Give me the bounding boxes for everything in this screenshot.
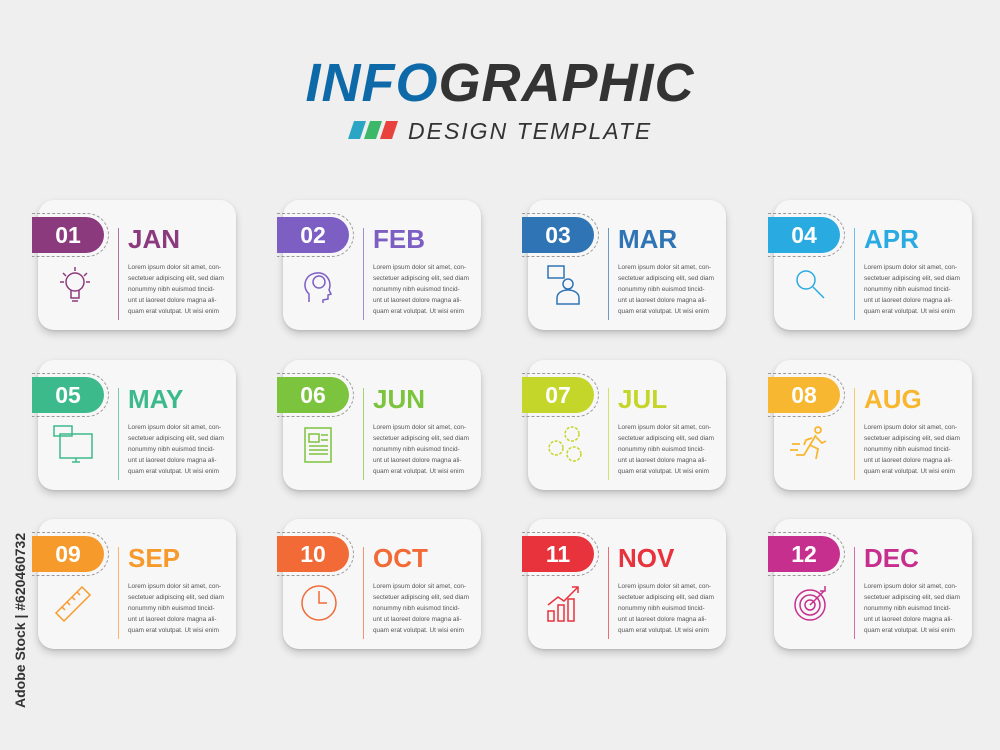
panel: 11 NOV: NOV [618, 543, 674, 573]
panel: 02 FEB: FEB [373, 224, 425, 254]
panel: 06 JUN: 06 [300, 382, 326, 408]
panel: 02 FEB: 02 [300, 222, 326, 248]
panel: 08 AUG: AUG [864, 384, 922, 414]
panel: 05 MAY: 05 [55, 382, 81, 408]
panel: 07 JUL: Lorem ipsum dolor sit amet, con- [618, 424, 711, 431]
panel: 11 NOV: sectetuer adipiscing elit, sed diam [618, 594, 714, 601]
panel: 09 SEP: sectetuer adipiscing elit, sed diam [128, 594, 224, 601]
panel: 11 NOV: quam erat volutpat. Ut wisi enim [618, 627, 709, 634]
panel: 08 AUG: unt ut laoreet dolore magna ali- [864, 457, 952, 464]
panel: 10 OCT: Lorem ipsum dolor sit amet, con- [373, 583, 466, 590]
panel: 09 SEP: Lorem ipsum dolor sit amet, con- [128, 583, 221, 590]
panel: 02 FEB: quam erat volutpat. Ut wisi enim [373, 308, 464, 315]
panel: 11 NOV: nonummy nibh euismod tincid- [618, 605, 705, 612]
icon: color stripes [348, 121, 398, 139]
panel: 03 MAR: sectetuer adipiscing elit, sed diam [618, 275, 714, 282]
panel: 05 MAY [38, 360, 236, 490]
panel: 01 JAN [38, 200, 236, 330]
panel: 08 AUG [774, 360, 972, 490]
panel: 11 NOV: unt ut laoreet dolore magna ali- [618, 616, 706, 623]
panel: 08 AUG: quam erat volutpat. Ut wisi enim [864, 468, 955, 475]
panel: 04 APR: unt ut laoreet dolore magna ali- [864, 297, 952, 304]
panel: 12 DEC: Lorem ipsum dolor sit amet, con- [864, 583, 957, 590]
panel: 05 MAY: MAY [128, 384, 183, 414]
panel: 12 DEC: quam erat volutpat. Ut wisi enim [864, 627, 955, 634]
panel: 07 JUL: unt ut laoreet dolore magna ali- [618, 457, 706, 464]
panel: 08 AUG: nonummy nibh euismod tincid- [864, 446, 951, 453]
panel: 03 MAR [528, 200, 726, 330]
panel: 05 MAY: quam erat volutpat. Ut wisi enim [128, 468, 219, 475]
panel: 07 JUL: 07 [545, 382, 571, 408]
panel: 01 JAN: nonummy nibh euismod tincid- [128, 286, 215, 293]
panel: 12 DEC: unt ut laoreet dolore magna ali- [864, 616, 952, 623]
panel: 07 JUL: sectetuer adipiscing elit, sed diam [618, 435, 714, 442]
panel: 12 DEC: sectetuer adipiscing elit, sed diam [864, 594, 960, 601]
panel: 03 MAR: quam erat volutpat. Ut wisi enim [618, 308, 709, 315]
panel: 11 NOV [528, 519, 726, 649]
panel: 02 FEB: nonummy nibh euismod tincid- [373, 286, 460, 293]
panel: 03 MAR: Lorem ipsum dolor sit amet, con- [618, 264, 711, 271]
panel: 02 FEB: Lorem ipsum dolor sit amet, con- [373, 264, 466, 271]
panel: 07 JUL [528, 360, 726, 490]
panel: 12 DEC [774, 519, 972, 649]
panel: 08 AUG: 08 [791, 382, 817, 408]
icon: monitor chat [53, 425, 93, 463]
icon: gears [548, 426, 582, 462]
panel: 02 FEB: unt ut laoreet dolore magna ali- [373, 297, 461, 304]
panel: 08 AUG: sectetuer adipiscing elit, sed diam [864, 435, 960, 442]
panel: 06 JUN: JUN [373, 384, 425, 414]
panel: 04 APR [774, 200, 972, 330]
panel: 10 OCT: quam erat volutpat. Ut wisi enim [373, 627, 464, 634]
icon: target [794, 586, 826, 621]
panel: 01 JAN: quam erat volutpat. Ut wisi enim [128, 308, 219, 315]
icon: head [304, 272, 332, 303]
panel: 06 JUN: unt ut laoreet dolore magna ali- [373, 457, 461, 464]
icon: clock [301, 585, 337, 621]
panel: 10 OCT: sectetuer adipiscing elit, sed diam [373, 594, 469, 601]
title: INFOGRAPHIC [305, 53, 694, 113]
panel: 05 MAY: unt ut laoreet dolore magna ali- [128, 457, 216, 464]
icon: ruler [55, 586, 91, 622]
panel: 06 JUN: nonummy nibh euismod tincid- [373, 446, 460, 453]
panel: 03 MAR: unt ut laoreet dolore magna ali- [618, 297, 706, 304]
panel: 12 DEC: nonummy nibh euismod tincid- [864, 605, 951, 612]
panel: 10 OCT: 10 [300, 541, 326, 567]
panel: 06 JUN [283, 360, 481, 490]
panel: 04 APR: 04 [791, 222, 817, 248]
subtitle: DESIGN TEMPLATE [408, 118, 652, 144]
panel: 09 SEP: 09 [55, 541, 81, 567]
panel: 06 JUN: quam erat volutpat. Ut wisi enim [373, 468, 464, 475]
panel: 05 MAY: nonummy nibh euismod tincid- [128, 446, 215, 453]
icon: magnifier [796, 270, 824, 298]
panel: 01 JAN: JAN [128, 224, 180, 254]
panel: 09 SEP: nonummy nibh euismod tincid- [128, 605, 215, 612]
panel: 09 SEP [38, 519, 236, 649]
panel: 07 JUL: quam erat volutpat. Ut wisi enim [618, 468, 709, 475]
panel: 01 JAN: unt ut laoreet dolore magna ali- [128, 297, 216, 304]
icon: growth chart [547, 586, 579, 622]
panel: 12 DEC: DEC [864, 543, 919, 573]
panel: 06 JUN: Lorem ipsum dolor sit amet, con- [373, 424, 466, 431]
panel: 05 MAY: Lorem ipsum dolor sit amet, con- [128, 424, 221, 431]
panel: 10 OCT: nonummy nibh euismod tincid- [373, 605, 460, 612]
panel: 02 FEB [283, 200, 481, 330]
panel: 04 APR: nonummy nibh euismod tincid- [864, 286, 951, 293]
panel: 01 JAN: Lorem ipsum dolor sit amet, con- [128, 264, 221, 271]
panel: 01 JAN: sectetuer adipiscing elit, sed diam [128, 275, 224, 282]
panel: 06 JUN: sectetuer adipiscing elit, sed diam [373, 435, 469, 442]
panel: 04 APR: Lorem ipsum dolor sit amet, con- [864, 264, 957, 271]
panel: 10 OCT [283, 519, 481, 649]
panel: 04 APR: sectetuer adipiscing elit, sed diam [864, 275, 960, 282]
panel: 10 OCT: OCT [373, 543, 428, 573]
icon: runner [790, 426, 826, 460]
panel: 02 FEB: sectetuer adipiscing elit, sed diam [373, 275, 469, 282]
panel: 09 SEP: unt ut laoreet dolore magna ali- [128, 616, 216, 623]
icon: newspaper [304, 427, 332, 463]
panel: 03 MAR: nonummy nibh euismod tincid- [618, 286, 705, 293]
panel: 08 AUG: Lorem ipsum dolor sit amet, con- [864, 424, 957, 431]
panel: 11 NOV: 11 [546, 541, 570, 567]
panel: 05 MAY: sectetuer adipiscing elit, sed diam [128, 435, 224, 442]
panel: 03 MAR: 03 [545, 222, 571, 248]
panel: 03 MAR: MAR [618, 224, 677, 254]
panel: 09 SEP: quam erat volutpat. Ut wisi enim [128, 627, 219, 634]
panel: 01 JAN: 01 [55, 222, 81, 248]
panel: 04 APR: quam erat volutpat. Ut wisi enim [864, 308, 955, 315]
icon: person speech [547, 265, 580, 305]
panel: 07 JUL: JUL [618, 384, 667, 414]
panel: 04 APR: APR [864, 224, 919, 254]
watermark side text: Adobe Stock | #620460732 [12, 533, 28, 708]
panel: 12 DEC: 12 [791, 541, 817, 567]
panel: 07 JUL: nonummy nibh euismod tincid- [618, 446, 705, 453]
panel: 09 SEP: SEP [128, 543, 180, 573]
panel: 11 NOV: Lorem ipsum dolor sit amet, con- [618, 583, 711, 590]
panel: 10 OCT: unt ut laoreet dolore magna ali- [373, 616, 461, 623]
icon: bulb [60, 267, 90, 302]
